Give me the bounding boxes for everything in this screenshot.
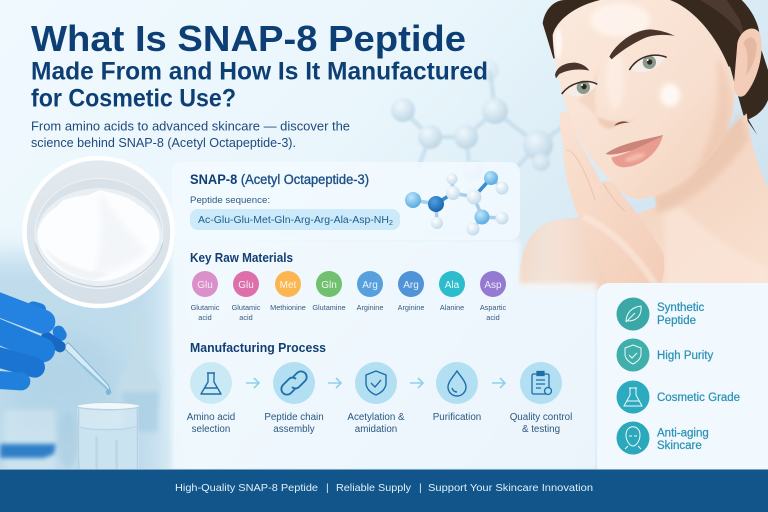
portrait: right eye [629, 55, 667, 73]
portrait: shoulder and neck [518, 110, 768, 290]
sequence pill [190, 209, 400, 230]
material: alanine: Ala [445, 280, 460, 291]
material: arginine: Arg [403, 280, 419, 291]
panel: SNAP-8 card [172, 162, 520, 240]
step: peptide chain assembly [264, 362, 324, 435]
icon: leaf [626, 306, 641, 322]
footer banner: Reliable Supply [336, 482, 412, 494]
icon: face [625, 427, 641, 449]
footer banner: High-Quality SNAP-8 Peptide [175, 482, 318, 494]
step: peptide chain assembly: Peptide chain [264, 412, 324, 423]
material: glutamic acid: Glu [197, 280, 213, 291]
step: acetylation and amidation [347, 362, 405, 435]
material: arginine [398, 271, 424, 312]
step: acetylation and amidation: amidation [355, 424, 397, 435]
icon: flask [201, 373, 221, 394]
heading: key raw materials: Key Raw Materials [190, 251, 293, 265]
portrait: left eye [562, 81, 597, 97]
icon: drop [448, 371, 466, 396]
title [31, 18, 488, 112]
raw materials row [191, 271, 507, 322]
material: aspartic acid [480, 271, 507, 322]
step: amino acid selection: Amino acid [187, 412, 235, 423]
benefit: high purity: High Purity [657, 350, 713, 362]
blue glove [0, 300, 61, 381]
step: purification [433, 362, 481, 423]
title: Made From and How Is It Manufactured [31, 58, 488, 86]
footer banner: | [326, 482, 329, 494]
sequence pill: 2 [389, 220, 393, 227]
step: quality control and testing [510, 362, 572, 435]
subtitle: science behind SNAP-8 (Acetyl Octapeptide-3). [31, 136, 296, 150]
subtitle: From amino acids to advanced skincare — discover the [31, 120, 350, 134]
footer banner: Support Your Skincare Innovation [428, 482, 593, 494]
process arrows [246, 378, 505, 388]
sequence pill: Ac-Glu-Glu-Met-Gln-Arg-Arg-Ala-Asp-NH [198, 215, 380, 226]
petri dish with powder [24, 158, 172, 306]
material: methionine: Met [280, 280, 297, 291]
material: glutamic acid: acid [239, 313, 253, 322]
dropper [63, 343, 111, 395]
step: amino acid selection: selection [192, 424, 230, 435]
heading: manufacturing process: Manufacturing Process [190, 341, 326, 355]
material: glutamic acid: Glutamic [191, 303, 220, 312]
gloved hand with dropper [0, 300, 111, 395]
step: acetylation and amidation: Acetylation & [347, 412, 405, 423]
material: glutamic acid: acid [198, 313, 212, 322]
step: amino acid selection [187, 362, 235, 435]
portrait: hair [543, 0, 768, 135]
material: arginine [357, 271, 383, 312]
material: alanine [439, 271, 465, 312]
step: peptide chain assembly: assembly [273, 424, 315, 435]
material: glutamic acid [191, 271, 220, 322]
material: methionine [270, 271, 306, 312]
material: glutamine [312, 271, 346, 312]
arrow [492, 378, 505, 388]
portrait: face [553, 0, 735, 199]
benefit: anti-aging skincare [616, 422, 709, 454]
panel: main content backdrop [172, 240, 597, 470]
portrait: nose [597, 117, 637, 128]
heading: SNAP-8 name: SNAP-8 (Acetyl Octapeptide-3) [190, 172, 369, 187]
icon: shield [625, 345, 641, 364]
benefit: anti-aging skincare: Skincare [657, 440, 702, 452]
material: aspartic acid: Aspartic [480, 303, 507, 312]
benefit: synthetic peptide: Synthetic [657, 302, 705, 314]
title: for Cosmetic Use? [31, 84, 236, 112]
icon: shield check [366, 371, 386, 395]
arrow [246, 378, 259, 388]
icon: flask [624, 388, 642, 406]
material: aspartic acid: acid [486, 313, 500, 322]
portrait: ear [734, 29, 762, 97]
material: glutamic acid [232, 271, 261, 322]
step: quality control and testing: & testing [522, 424, 560, 435]
benefit: synthetic peptide: Peptide [657, 315, 696, 327]
material: arginine: Arginine [398, 303, 424, 312]
subtitle [31, 120, 350, 150]
benefit: high purity [616, 338, 713, 372]
manufacturing process flow [187, 362, 572, 435]
icon: clipboard [532, 372, 552, 394]
arrow [410, 378, 423, 388]
molecule model [405, 171, 508, 236]
material: aspartic acid: Asp [484, 280, 502, 291]
step: quality control and testing: Quality control [510, 412, 572, 423]
benefit: cosmetic grade [616, 380, 740, 414]
material: arginine: Arginine [357, 303, 383, 312]
lab background scene [0, 255, 165, 500]
portrait: lips [605, 135, 663, 167]
portrait: woman touching her face [518, 0, 768, 290]
material: arginine: Arg [362, 280, 378, 291]
footer banner [0, 469, 768, 512]
glass beaker [77, 402, 140, 470]
step: purification: Purification [433, 412, 481, 423]
arrow [328, 378, 341, 388]
portrait: eyebrows [555, 29, 675, 78]
material: methionine: Methionine [270, 303, 306, 312]
label: peptide sequence: Peptide sequence: [190, 195, 270, 206]
background molecule [391, 59, 565, 180]
benefit: synthetic peptide [616, 298, 705, 330]
powder pile [38, 190, 159, 281]
benefit: cosmetic grade: Cosmetic Grade [657, 392, 740, 404]
panel: product benefits [597, 283, 768, 470]
benefit: anti-aging skincare: Anti-aging [657, 428, 709, 440]
material: alanine: Alanine [440, 303, 464, 312]
portrait: background gap between hand and neck [623, 199, 655, 215]
icon: chain link [281, 371, 307, 395]
title: What Is SNAP-8 Peptide [31, 18, 466, 59]
material: glutamine: Glutamine [312, 303, 346, 312]
material: glutamic acid: Glutamic [232, 303, 261, 312]
portrait: hand [560, 111, 664, 290]
material: glutamine: Gln [321, 280, 337, 291]
material: glutamic acid: Glu [238, 280, 254, 291]
footer banner: | [419, 482, 422, 494]
